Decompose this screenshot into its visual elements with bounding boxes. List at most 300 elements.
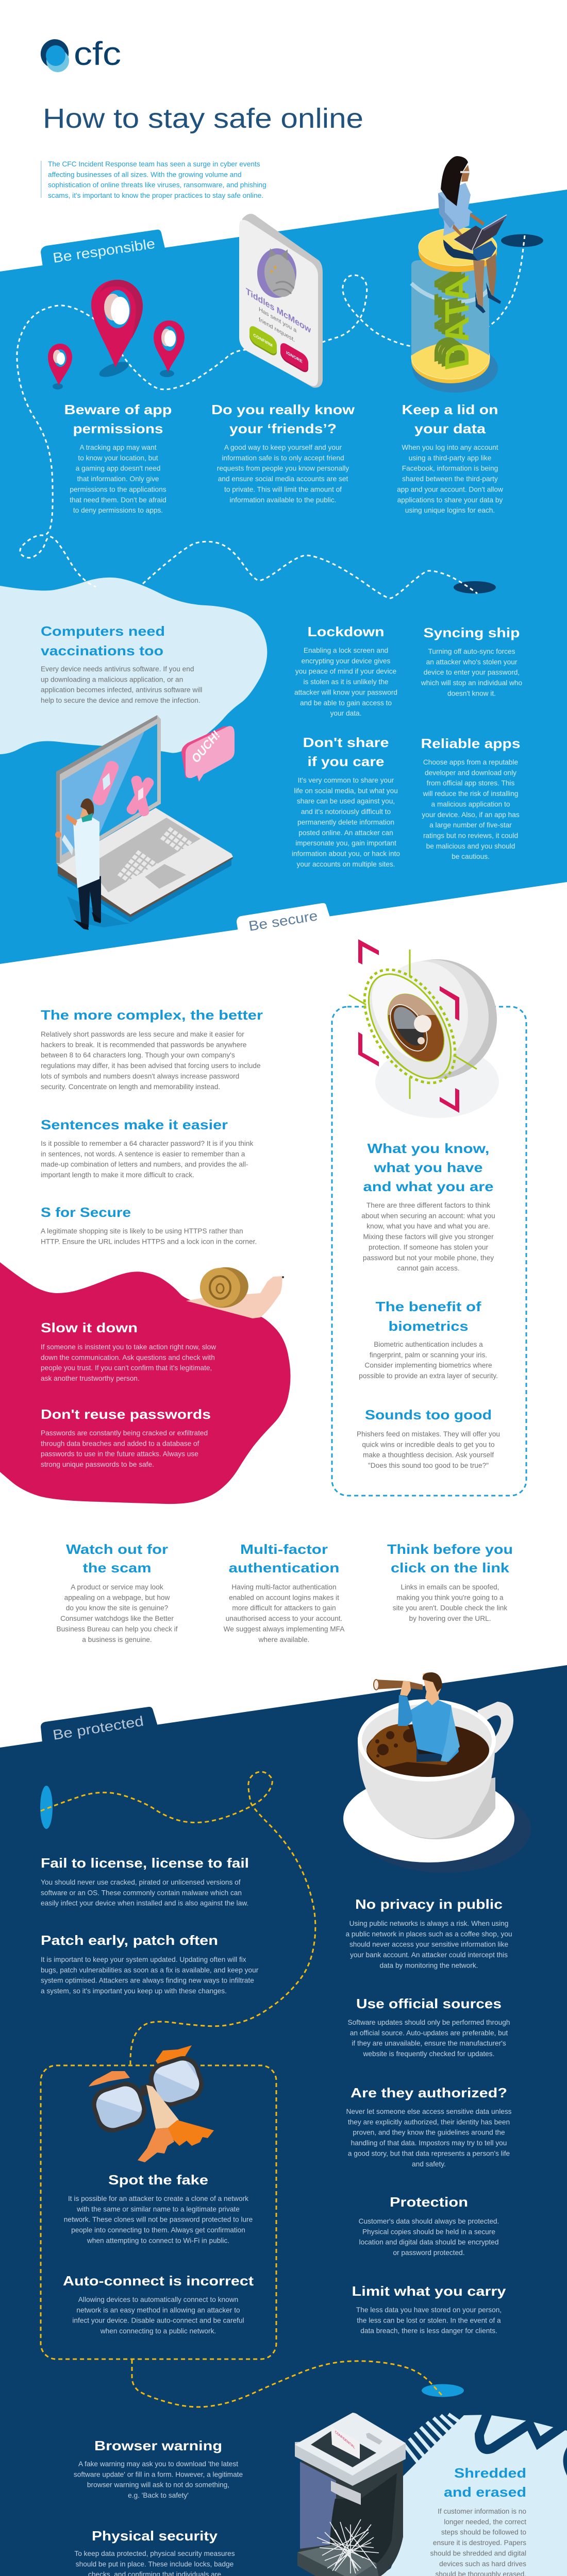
moustache left [138,2128,174,2162]
paper strips [331,2481,361,2505]
tab: be protected [41,1707,158,1743]
bandages [91,759,156,817]
text block: don't reuse passwords: passwords to use in the future attacks. Always use [41,1450,198,1458]
text block: think before you click on the link: by hovering over the URL. [409,1615,491,1622]
text block: what you know: cannot gain access. [397,1264,459,1272]
text block: shredded and erased: devices such as hard drives [439,2560,526,2568]
bridge [140,2081,155,2097]
text block: syncing ship: an attacker who's stolen your [426,658,518,666]
text block: lockdown: Enabling a lock screen and [304,647,388,654]
heading block: keep a lid on your data: app and your account. Don't allow [397,485,503,493]
text block: slow it down: If someone is insistent you to take action right now, slow [41,1343,216,1351]
text block: sentences make it easier: made-up combination of letters and numbers, and provides the all- [41,1161,248,1168]
text block: auto-connect is incorrect: infect your device. Disable auto-connect and be careful [72,2317,244,2325]
text block: the more complex, the better: regulations may differ, it has been advised that forcing users to include [41,1062,261,1070]
title: How to stay safe online [43,103,363,134]
text block: think before you click on the link: making you think you're going to a [396,1594,504,1601]
ellipse: start of yellow path [40,1786,53,1829]
text block: auto-connect is incorrect: Allowing devices to automatically connect to known [78,2296,238,2303]
text block: don't share if you care: share can be used against you, [297,798,395,805]
text block: the benefit of biometrics: possible to provide an extra layer of security. [359,1372,498,1380]
blob: computers background [0,578,267,754]
text block: physical security: should be put in place. These include locks, badge [76,2560,234,2568]
heading block: do you really know your friends: your ‘friends’? [229,421,337,436]
text block: the benefit of biometrics: The benefit of [375,1299,481,1314]
text block: limit what you carry: data breach, there is less danger for clients. [360,2327,497,2335]
text block: auto-connect is incorrect: when connecting to a public network. [100,2327,216,2335]
text block: patch early: Patch early, patch often [41,1933,218,1948]
heading block: beware of app permissions: permissions [73,421,163,436]
text block: syncing ship: Turning off auto-sync forces [428,648,515,655]
text block: use official sources: if they are unavailable, ensure the manufacturer's [352,2040,506,2047]
text block: sentences make it easier: Is it possible to remember a 64 character password? It is if you think [41,1140,253,1147]
text block: reliable apps: will reduce the risk of installing [423,790,518,798]
stool [419,233,497,272]
text block: watch out for the scam: Business Bureau can help you check if [56,1625,178,1633]
text block: lockdown: and be able to gain access to [300,699,392,707]
text block: computers need vaccinations too: application becomes infected, antivirus software will [41,686,202,694]
iris [376,984,456,1072]
text block: are they authorized: Never let someone else access sensitive data unless [346,2108,512,2115]
heading block: keep a lid on your data: Keep a lid on [402,402,498,417]
text block: don't share if you care: impersonate you, gain important [295,839,396,847]
text block: lockdown: Lockdown [307,624,385,639]
text block: the more complex, the better: hackers to break. It is recommended that passwords be anywhere [41,1041,246,1048]
body [297,2459,403,2576]
text block: spot the fake: network. These clones will not be password protected to lure [64,2216,253,2224]
text block: think before you click on the link: Links in emails can be spoofed, [401,1583,499,1591]
heading block: do you really know your friends: Do you really know [211,402,355,417]
cup shadow [374,1777,495,1839]
blob: shredded background [357,2410,567,2576]
text block: multi-factor authentication: enabled on account logins makes it [229,1594,339,1601]
text block: computers need vaccinations too: help to secure the device and remove the infection. [41,697,201,704]
text block: spot the fake: Spot the fake [108,2172,208,2188]
eyelid ellipse fill [352,960,468,1093]
green data letters: DATA [435,270,473,371]
heading block: beware of app permissions: to know your location, but [78,454,158,462]
right frame and lens [149,2056,204,2107]
base [297,2544,376,2576]
text block: syncing ship: device to enter your password, [424,669,520,676]
stripes [404,2414,462,2465]
heading block: do you really know your friends [211,402,355,504]
text block: no privacy in public: a public network in places such as a coffee shop, you [345,1930,512,1938]
confidential paper: CONFIDENTIAL [335,2430,355,2450]
text block: use official sources: Software updates should only be performed through [347,2019,510,2026]
heading block: beware of app permissions [64,402,172,514]
ellipse: end of white path [454,581,496,594]
text block: reliable apps: a malicious application to [431,800,510,808]
text block: no privacy in public: should never access your sensitive information like [349,1941,508,1948]
logo: cfc: cfc [74,35,121,72]
text block: computers need vaccinations too [41,623,202,704]
text block: sounds too good [357,1407,500,1469]
text block: think before you click on the link: site you aren't. Double check the link [393,1604,507,1612]
text block: shredded and erased: If customer information is no [438,2507,526,2515]
text block: sounds too good: Sounds too good [365,1407,492,1422]
text block: watch out for the scam [56,1541,178,1643]
text block: the more complex, the better: security. Concentrate on length and memorability instead. [41,1083,220,1091]
heading block: keep a lid on your data [397,402,503,514]
text block: think before you click on the link [387,1541,513,1622]
text block: reliable apps: your device. Also, if an app has [422,811,520,819]
text block: multi-factor authentication: unauthorised access to your account. [226,1615,342,1622]
text block: what you know: know, what you have and what you are. [366,1223,490,1230]
laptop screen [62,724,157,855]
moustache right [168,2120,214,2146]
dashed route: yellow path after box [132,2360,443,2407]
confidential paper [331,2426,360,2459]
text block: fail to license: Fail to license, license to fail [41,1855,249,1871]
text block: think before you click on the link: click on the link [391,1560,510,1575]
text block: spot the fake: people into connecting to them. Always get confirmation [71,2226,245,2234]
heading block: do you really know your friends: A good way to keep yourself and your [224,444,342,451]
dashed route: white path part two [143,541,477,598]
text block: protection: or password protected. [393,2249,465,2257]
text block: slow it down: people you trust. If you can't confirm that it's legitimate, [41,1364,212,1372]
text block: what you know: password but not your mobile phone, they [363,1254,494,1262]
text block: protection: location and digital data should be encrypted [359,2239,498,2246]
scan ticks [349,950,477,1099]
text block: spot the fake: when attempting to connect to Wi-Fi in public. [87,2236,229,2244]
blouse [438,183,473,236]
text block: what you know: protection. If someone has stolen your [369,1243,488,1251]
laptop [454,215,507,251]
speech bubble: ouch [181,726,235,782]
illustration: friend request card [239,214,323,387]
text block: browser warning [74,2438,243,2499]
slot [311,2429,376,2467]
text block: syncing ship: Syncing ship [424,625,520,640]
saucer [343,1775,514,1862]
text block: protection [359,2194,499,2257]
text block: shredded and erased: ensure it is destroyed. Papers [433,2539,526,2547]
dashed route: yellow path [41,1772,315,2065]
text block: are they authorized: handling of that data. Impostors may try to tell you [351,2139,507,2147]
heading block: keep a lid on your data: applications to share your data by [397,496,503,504]
text block: don't share if you care: Don't share [303,735,389,750]
text block: don't share if you care: It's very common to share your [298,776,394,784]
heading block: beware of app permissions: Beware of app [64,402,172,417]
text block: lockdown: you peace of mind if your device [295,668,396,675]
text block: watch out for the scam: the scam [82,1560,152,1575]
text block: limit what you carry [352,2283,506,2335]
laptop base [58,808,233,917]
text block: what you know [361,1141,495,1272]
text block: sounds too good: make a thoughtless decision. Ask yourself [363,1451,494,1459]
heading block: keep a lid on your data: shared between the third-party [402,475,498,483]
left eyebrow [89,2071,130,2087]
illustration: woman with laptop on data pillar [411,156,507,393]
text block: auto-connect is incorrect: Auto-connect is incorrect [63,2273,254,2289]
speech bubble: ouch: OUCH! [189,728,223,765]
text block: shredded and erased: Shredded [454,2465,526,2481]
text block: protection: Customer's data should always be protected. [359,2217,499,2225]
card name: Tiddles McMeow [246,285,311,335]
yellow disc [411,338,490,383]
cup handle [477,1702,513,1753]
laptop shadow [58,856,231,922]
text block: no privacy in public: Using public networks is always a risk. When using [349,1920,508,1927]
text block: browser warning: software update' or fill in a form. However, a legitimate [74,2470,243,2478]
text block: physical security: To keep data protected, physical security measures [74,2550,235,2557]
intro text block: The CFC Incident Response team has seen a surge in cyber events [48,160,260,168]
text block: don't share if you care: information about you, or hack into [292,850,400,857]
text block: computers need vaccinations too: vaccinations too [41,643,163,658]
navy squiggle [479,2410,567,2449]
icon: medium map pin [154,320,185,377]
text block: no privacy in public: No privacy in public [355,1896,503,1912]
ellipse: end of yellow path [422,2384,464,2397]
text block: don't share if you care: your accounts on multiple sites. [297,860,395,868]
text block: don't reuse passwords: through data breaches and added to a database of [41,1439,199,1447]
tab: be secure: Be secure [247,908,319,934]
text block: computers need vaccinations too: up downloading a malicious application, or an [41,675,183,683]
tab: be responsible: Be responsible [52,236,156,266]
text block: use official sources: website is frequently checked for updates. [363,2050,494,2058]
button: ignore: IGNORE [286,350,303,364]
text block: auto-connect is incorrect [63,2273,254,2335]
text block: don't share if you care: permanently delete information [297,818,394,826]
text block: s for secure: HTTP. Ensure the URL includes HTTPS and a lock icon in the corner. [41,1238,257,1245]
text block: sentences make it easier: in sentences, not words. A sentence is easier to remember than a [41,1150,245,1158]
text block: slow it down: Slow it down [41,1320,138,1335]
illustration: man in coffee cup [343,1672,531,1873]
text block: reliable apps: a large number of five-star [429,821,512,829]
dashed route: white path part one [17,235,525,587]
heading block: do you really know your friends: requests from people you know personally [217,465,349,472]
text block: slow it down: down the communication. Ask questions and check with [41,1353,215,1361]
glass band [411,283,489,302]
text block: browser warning: Browser warning [94,2438,222,2453]
text block: patch early: system optimised. Attackers are always finding new ways to infiltrate [41,1977,254,1985]
text block: are they authorized: and safety. [412,2160,446,2168]
button: confirm [249,324,277,358]
green data letters: DATA [427,265,465,366]
text block: the benefit of biometrics: Consider implementing biometrics where [364,1362,492,1369]
heading block: beware of app permissions: that information. Only give [77,475,159,483]
green data letters: DATA [438,273,476,374]
text block: multi-factor authentication: We suggest always implementing MFA [224,1625,345,1633]
trackpad [145,864,186,889]
text block: limit what you carry: Limit what you carry [352,2283,506,2299]
heading block: beware of app permissions: to deny permissions to apps. [73,506,163,514]
text block: the benefit of biometrics: biometrics [389,1318,468,1334]
text block: the more complex, the better: The more complex, the better [41,1007,263,1023]
text block: multi-factor authentication: more difficult for attackers to gain [232,1604,336,1612]
telescope [375,1680,423,1690]
text block: what you know: There are three different factors to think [366,1201,490,1209]
right eyebrow [156,2045,192,2067]
heading block: beware of app permissions: that need them. Don't be afraid [70,496,166,504]
text block: s for secure: A legitimate shopping site is likely to be using HTTPS rather than [41,1227,243,1235]
text block: multi-factor authentication: Having multi-factor authentication [231,1583,337,1591]
text block: protection: Protection [390,2194,468,2210]
lid [295,2439,406,2486]
text block: patch early: bugs, patch vulnerabilities as soon as a fix is available, and keep your [41,1966,259,1974]
heading block: beware of app permissions: a gaming app doesn't need [76,465,160,472]
heading block: beware of app permissions: A tracking app may want [79,444,157,451]
text block: spot the fake: with the same or similar name to a legitimate private [76,2205,240,2213]
text block: what you know: what you have [373,1160,482,1175]
dashed box: spot the fake [41,2065,276,2359]
card message: friend request. [259,316,295,344]
card message: Has sent you a [259,306,297,334]
face [461,165,470,182]
text block: the more complex, the better [41,1007,263,1091]
text block: use official sources: an official source. Auto-updates are preferable, but [350,2029,508,2037]
text block: shredded and erased: steps should be followed to [441,2529,526,2536]
text block: multi-factor authentication: authentication [229,1560,339,1575]
intro text block: scams, it's important to know the proper practices to stay safe online. [48,192,263,199]
button [366,2433,382,2445]
panel: be protected background [0,1665,567,2576]
text block: don't share if you care [292,735,400,868]
heading block: do you really know your friends: to private. This will limit the amount of [224,485,342,493]
text block: reliable apps: be cautious. [452,853,490,860]
text block: spot the fake [64,2172,253,2244]
legs [473,260,485,307]
text block: watch out for the scam: Consumer watchdogs like the Better [60,1615,174,1622]
text block: what you know: What you know, [367,1141,490,1156]
text block: what you know: and what you are [363,1179,494,1194]
scan corner brackets [358,939,459,1113]
text block: computers need vaccinations too: Every device needs antivirus software. If you end [41,665,194,673]
glass cylinder [411,260,489,355]
text block: don't share if you care: posted online. An attacker can [298,829,393,837]
text block: reliable apps: developer and download only [425,769,516,776]
text block: the benefit of biometrics: fingerprint, palm or scanning your iris. [370,1351,487,1359]
text block: reliable apps: from official app stores. This [427,779,514,787]
text block: no privacy in public: your bank account. An attacker could intercept this [350,1951,508,1959]
text block: the benefit of biometrics [359,1299,498,1380]
text block: fail to license [41,1855,249,1907]
text block: the more complex, the better: Relatively short passwords are less secure and make it easier for [41,1030,244,1038]
heading block: keep a lid on your data: Facebook, information is being [402,465,498,472]
arms [453,224,473,241]
text block: s for secure: S for Secure [41,1205,131,1220]
text block: what you know: about when securing an account: what you [361,1212,495,1219]
text block: don't reuse passwords: strong unique passwords to be safe. [41,1461,154,1468]
shredded pile [317,2519,379,2573]
text block: the more complex, the better: between 8 to 64 characters long. Though your own company's [41,1052,235,1059]
text block: browser warning: e.g. 'Back to safety' [128,2492,189,2499]
text block: are they authorized: they are explicitly authorized, their identity has been [348,2118,510,2126]
dashed box: right column [332,1007,526,1496]
saucer shadow [358,1785,531,1873]
illustration: laptop with doctor [55,715,235,930]
text block: sentences make it easier: important length to make it more difficult to crack. [41,1171,194,1179]
text block: don't share if you care: if you care [307,754,385,769]
man [374,1672,460,1762]
eyeball [377,959,497,1079]
text block: syncing ship: doesn't know it. [447,689,496,697]
laptop screen bezel [56,715,161,866]
keyboard [88,818,201,892]
ellipse: start of white path [501,234,543,247]
text block: multi-factor authentication: where available. [258,1636,309,1643]
left frame and lens [92,2082,146,2132]
nose [146,2085,179,2129]
tab: be protected: Be protected [52,1713,145,1743]
text block: don't reuse passwords: Passwords are constantly being cracked or exfiltrated [41,1429,208,1437]
button: ignore [280,341,308,375]
green scan rings [352,960,468,1093]
text block: lockdown: attacker will know your password [294,688,397,696]
text block: sounds too good: quick wins or incredible deals to get you to [362,1440,495,1448]
cup body [358,1738,495,1838]
text block: sentences make it easier: Sentences make it easier [41,1117,228,1132]
text block: watch out for the scam: a business is genuine. [82,1636,152,1643]
heading block: keep a lid on your data: using unique logins for each. [405,506,495,514]
button: confirm: CONFIRM [253,332,273,348]
text block: physical security: Physical security [92,2528,218,2544]
logo: cfc [37,35,121,72]
text block: shredded and erased: longer needed, the correct [444,2518,526,2526]
icon: small map pin [48,344,72,389]
text block: auto-connect is incorrect: network is an easy method in allowing an attacker to [76,2306,240,2314]
hair [441,156,468,206]
heading block: do you really know your friends: and ensure social media accounts are set [218,475,348,483]
text block: don't reuse passwords: Don't reuse passwords [41,1406,211,1422]
glasses [460,171,470,173]
text block: watch out for the scam: appealing on a webpage, but how [64,1594,170,1601]
doctor [55,799,101,930]
text block: don't share if you care: life on social media, but what you [294,787,398,794]
text block: shredded and erased [430,2465,526,2576]
green data letters: DATA [431,267,469,368]
skirt [443,240,478,261]
text block: reliable apps [421,736,521,860]
text block: use official sources: Use official sources [356,1996,502,2011]
text block: reliable apps: be malicious and you should [426,842,515,850]
text block: don't reuse passwords [41,1406,211,1468]
text block: what you know: Mixing these factors will give you stronger [363,1233,494,1241]
illustration: snail [186,1263,284,1318]
text block: protection: Physical copies should be held in a secure [362,2228,495,2235]
text block: shredded and erased: and erased [444,2484,526,2500]
text block: patch early [41,1933,259,1995]
text block: fail to license: You should never use cracked, pirated or unlicensed versions of [41,1878,241,1886]
text block: sounds too good: Phishers feed on mistakes. They will offer you [357,1430,500,1438]
coffee [366,1723,489,1777]
text block: think before you click on the link: Think before you [387,1541,513,1557]
text block: multi-factor authentication [224,1541,345,1643]
icon: large map pin [91,280,143,380]
text block: slow it down: ask another trustworthy person. [41,1375,140,1382]
text block: watch out for the scam: do you know the site is genuine? [66,1604,169,1612]
text block: limit what you carry: the less can be lost or stolen. In the event of a [357,2316,501,2324]
text block: sounds too good: "Does this sound too good to be true?" [368,1462,489,1469]
text block: reliable apps: ratings but no reviews, it could [423,832,518,839]
text block: are they authorized: a good story, but that data represents a person's life [348,2149,510,2157]
text block: shredded and erased: should be shredded and digital [430,2549,526,2557]
text block: the benefit of biometrics: Biometric authentication includes a [374,1341,483,1348]
illustration: eye scan [346,939,499,1118]
panel: pink blob [0,1262,291,1504]
text block: syncing ship [421,625,523,697]
text block: the more complex, the better: lots of symbols and numbers doesn't always increase password [41,1072,239,1080]
text block: watch out for the scam: Watch out for [66,1541,168,1557]
text block: no privacy in public [345,1896,512,1969]
text block: sentences make it easier [41,1117,253,1179]
text block: lockdown: is stolen as it is unlikely the [303,678,389,686]
text block: patch early: It is important to keep your system updated. Updating often will fix [41,1956,246,1963]
heading block: keep a lid on your data: using a third-party app like [409,454,491,462]
text block: reliable apps: Reliable apps [421,736,521,751]
text block: computers need vaccinations too: Computers need [41,623,165,639]
